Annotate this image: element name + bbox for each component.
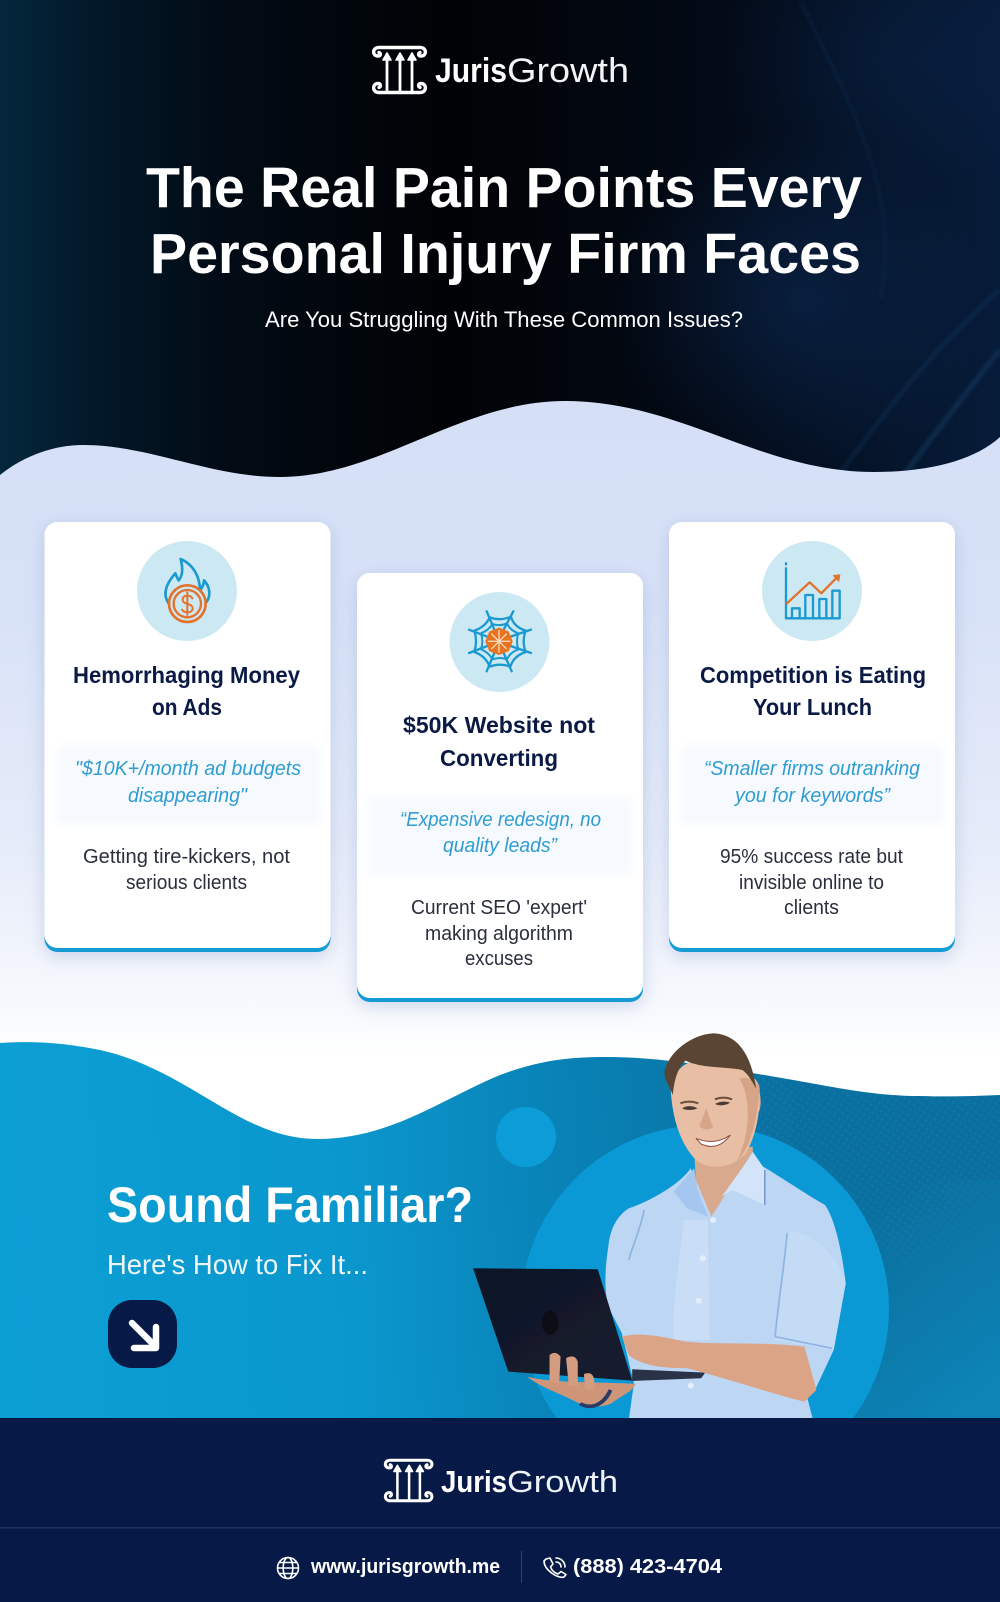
quote: quality leads” (443, 835, 558, 857)
title (146, 156, 862, 286)
quote: “Smaller firms outranking (704, 758, 920, 780)
icon: spider web (450, 592, 550, 692)
logo text: top: Juris (435, 52, 507, 90)
heading: sound familiar: Sound Familiar? (107, 1177, 473, 1233)
typing hand and forearm (622, 1335, 816, 1402)
icon: phone (544, 1558, 566, 1577)
quote: "$10K+/month ad budgets (75, 758, 301, 780)
card title: Converting (440, 745, 558, 771)
body text: 95% success rate but (720, 846, 903, 868)
body text: excuses (465, 948, 533, 970)
logo: footer: Growth (507, 1464, 618, 1499)
logo: footer (385, 1460, 618, 1501)
icon: growth chart (762, 541, 862, 641)
eyes (682, 1102, 730, 1110)
neck (694, 1147, 753, 1220)
collar (674, 1168, 708, 1217)
face (671, 1061, 760, 1167)
eyebrows (680, 1098, 732, 1103)
card title: Your Lunch (753, 694, 872, 720)
shirt buttons (688, 1217, 716, 1389)
laptop (473, 1268, 632, 1381)
holding hand (527, 1377, 636, 1406)
hair (665, 1033, 756, 1095)
illustration: man with laptop (473, 1033, 846, 1420)
body text: Current SEO 'expert' (411, 897, 587, 919)
logo: top (374, 48, 425, 92)
shirt (605, 1152, 846, 1420)
quote (75, 758, 301, 807)
card title: on Ads (152, 694, 222, 720)
logo text: top: Growth (507, 52, 629, 90)
panel: card 3 competition (669, 522, 955, 952)
body text (720, 846, 903, 919)
subtitle: Are You Struggling With These Common Issues? (265, 307, 743, 332)
panel: footer (0, 1418, 1000, 1602)
body text: clients (784, 897, 839, 919)
body text: Getting tire-kickers, not (83, 846, 290, 868)
icon: arrow button (108, 1300, 177, 1368)
icon: flaming coin (137, 541, 237, 641)
card title: $50K Website not (403, 712, 595, 738)
subheading: Here's How to Fix It... (107, 1249, 368, 1280)
body text: invisible online to (739, 872, 884, 894)
body text (411, 897, 587, 970)
header background (0, 0, 1000, 500)
quote: “Expensive redesign, no (400, 809, 601, 831)
card title: Hemorrhaging Money (73, 662, 300, 688)
watch (579, 1389, 612, 1408)
icon: column with arrows (374, 48, 425, 92)
website: www.jurisgrowth.me (310, 1556, 500, 1578)
smile (696, 1135, 730, 1146)
page background with header wave (0, 401, 1000, 1110)
body text: making algorithm (425, 923, 573, 945)
logo text: top (435, 52, 629, 90)
panel: card 1 hemorrhaging money (44, 522, 330, 952)
icon: globe (278, 1558, 298, 1578)
title: Personal Injury Firm Faces (150, 222, 861, 286)
card title (700, 662, 926, 720)
panel: call to action background (0, 1042, 1000, 1418)
card title (73, 662, 300, 720)
nose (699, 1108, 713, 1129)
ear (753, 1090, 761, 1114)
logo: footer: Juris (441, 1464, 507, 1499)
quote: disappearing" (128, 785, 248, 807)
card title: Competition is Eating (700, 662, 926, 688)
quote (704, 758, 920, 807)
body text: serious clients (126, 872, 247, 894)
panel: card 2 website not converting (357, 573, 643, 1002)
phone number: (888) 423-4704 (573, 1556, 723, 1578)
quote (400, 809, 601, 857)
body text (83, 846, 290, 894)
small circle (496, 1107, 556, 1167)
quote: you for keywords” (733, 785, 891, 807)
title: The Real Pain Points Every (146, 156, 862, 220)
big circle (521, 1125, 889, 1493)
card title (403, 712, 595, 771)
